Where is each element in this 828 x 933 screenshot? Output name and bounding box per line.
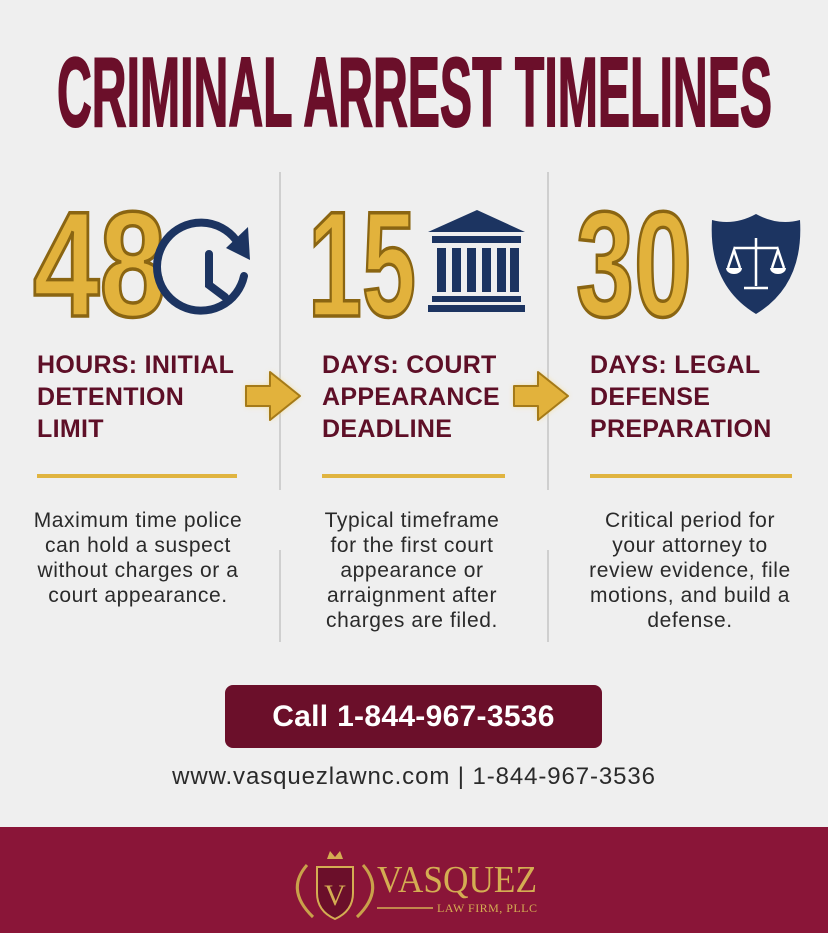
heading: court: DEADLINE (322, 415, 452, 443)
arrow 2 (510, 370, 570, 422)
heading: hours: LIMIT (37, 415, 104, 443)
body text 2 (325, 509, 499, 632)
icon: shield with scales (712, 214, 800, 314)
logo: LAW FIRM, PLLC (437, 901, 537, 915)
logo (296, 851, 537, 920)
heading: court (322, 351, 500, 443)
heading: hours: HOURS: INITIAL (37, 351, 234, 379)
heading: hours (37, 351, 234, 443)
body text 1: can hold a suspect (45, 534, 231, 557)
body text 3: motions, and build a (590, 584, 790, 607)
call button (225, 685, 602, 748)
body text 2: Typical timeframe (325, 509, 499, 532)
heading: defense: PREPARATION (590, 415, 772, 443)
body text 3 (589, 509, 791, 632)
body text 2: arraignment after (327, 584, 497, 607)
body text 3: defense. (647, 609, 733, 632)
heading: defense: DAYS: LEGAL (590, 351, 760, 379)
body text 1 (34, 509, 242, 607)
heading: hours: DETENTION (37, 383, 184, 411)
body text 1: without charges or a (37, 559, 239, 582)
body text 1: court appearance. (48, 584, 228, 607)
icon: clock (157, 223, 244, 311)
heading: court: APPEARANCE (322, 383, 500, 411)
logo: V (324, 879, 346, 912)
call button: Call 1-844-967-3536 (272, 700, 555, 733)
body text 1: Maximum time police (34, 509, 242, 532)
heading: defense: DEFENSE (590, 383, 710, 411)
heading: court: DAYS: COURT (322, 351, 497, 379)
arrow 1 (242, 370, 302, 422)
website and phone: www.vasquezlawnc.com | 1-844-967-3536 (172, 763, 656, 790)
body text 3: review evidence, file (589, 559, 791, 582)
logo: VASQUEZ (377, 859, 537, 901)
heading: defense (590, 351, 772, 443)
icon: courthouse (428, 210, 525, 312)
body text 3: your attorney to (612, 534, 768, 557)
body text 2: appearance or (340, 559, 484, 582)
footer band (0, 827, 828, 933)
body text 2: charges are filed. (326, 609, 498, 632)
body text 2: for the first court (330, 534, 494, 557)
body text 3: Critical period for (605, 509, 775, 532)
